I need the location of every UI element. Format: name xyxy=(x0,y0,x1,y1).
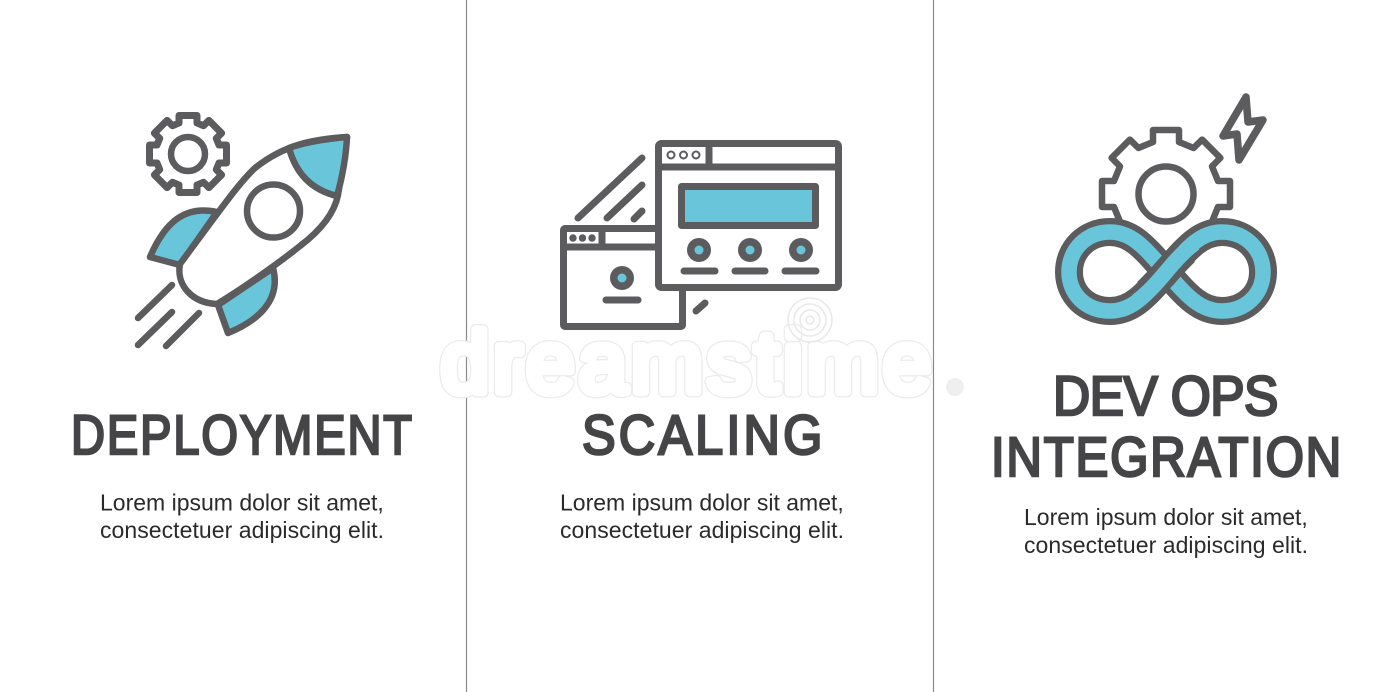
icon: browser windows xyxy=(564,144,838,326)
heading: dev ops integration: INTEGRATION xyxy=(991,426,1341,489)
text block: dev ops integration: consectetuer adipiscing elit. xyxy=(1024,532,1308,558)
icon: rocket nose xyxy=(289,137,347,196)
watermark: dreamstime xyxy=(441,315,931,411)
panel: scaling xyxy=(560,144,844,543)
icon: rocket with gear xyxy=(138,116,347,346)
heading: dev ops integration: DEV OPS xyxy=(1053,365,1278,427)
text block: dev ops integration xyxy=(1024,504,1308,558)
icon: small gear xyxy=(150,116,226,192)
text block: scaling: consectetuer adipiscing elit. xyxy=(560,517,844,543)
icon: infinity loop xyxy=(1069,232,1263,311)
panel: dev ops integration xyxy=(991,97,1341,558)
text block: deployment: Lorem ipsum dolor sit amet, xyxy=(100,490,384,516)
watermark: dreamstime xyxy=(441,315,931,411)
icon: large window xyxy=(658,144,838,288)
icon: speed lines xyxy=(138,285,199,346)
text block: deployment: consectetuer adipiscing elit. xyxy=(100,517,384,543)
icon: small window xyxy=(564,228,682,326)
heading: deployment: DEPLOYMENT xyxy=(71,403,412,466)
icon: large gear xyxy=(1102,130,1230,244)
heading: dev ops integration xyxy=(991,365,1341,489)
text block: scaling xyxy=(560,490,844,543)
icon: rocket body xyxy=(179,137,347,304)
icon: rocket fins xyxy=(150,210,275,333)
icon: rocket window xyxy=(247,184,300,238)
text block: deployment xyxy=(100,490,384,543)
heading: scaling: SCALING xyxy=(582,405,822,467)
text block: scaling: Lorem ipsum dolor sit amet, xyxy=(560,490,844,516)
icon: gear, bolt and infinity xyxy=(1069,97,1263,311)
icon: lightning bolt xyxy=(1223,97,1263,160)
icon: diagonal lines xyxy=(578,158,705,311)
panel: deployment xyxy=(71,116,412,543)
text block: dev ops integration: Lorem ipsum dolor sit amet, xyxy=(1024,504,1308,530)
